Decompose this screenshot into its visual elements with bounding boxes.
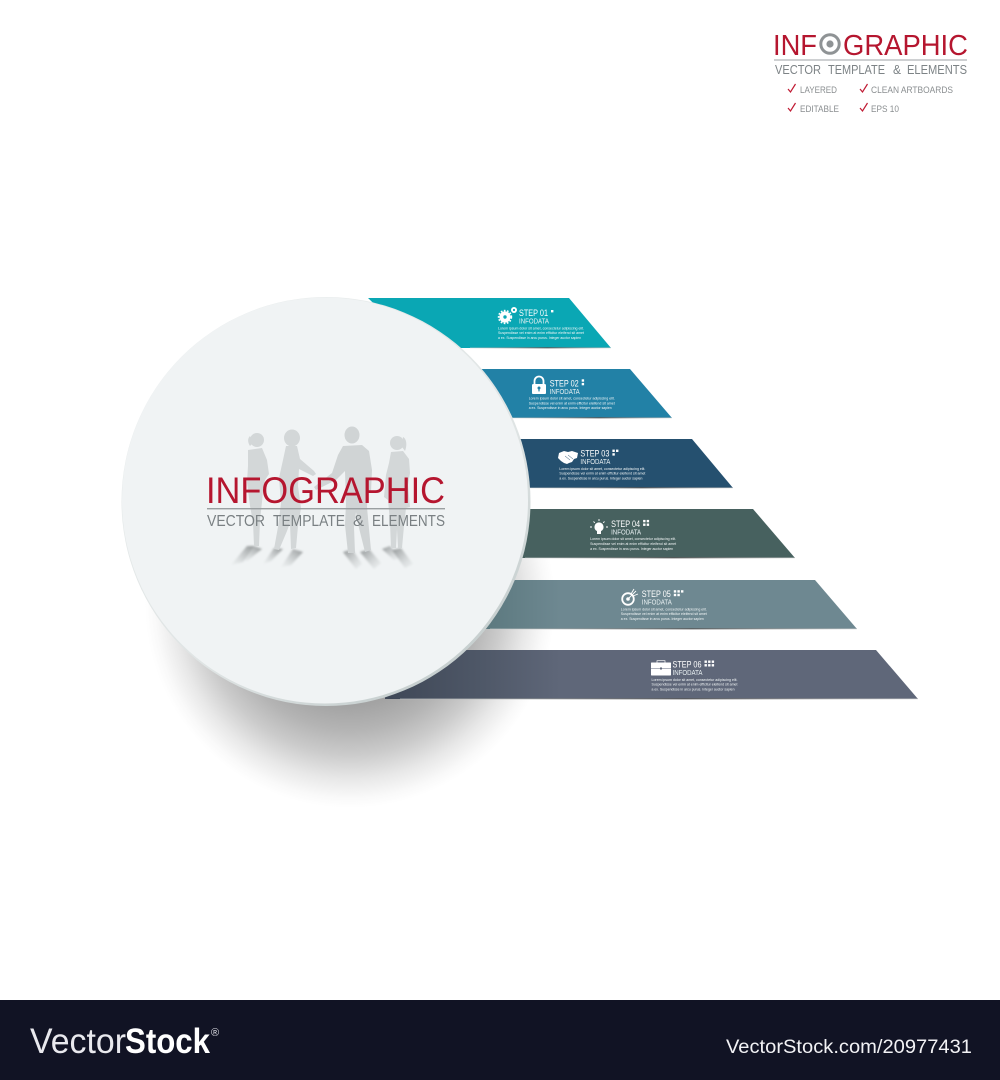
step 06 text: Suspendisse vel enim at enim efficitur eleifend sit amet — [652, 682, 738, 686]
centre title: & — [353, 513, 365, 530]
logo subtitle: VECTOR — [775, 63, 821, 77]
logo subtitle: TEMPLATE — [828, 63, 885, 77]
step 01 text: Lorem ipsum dolor sit amet, consectetur adipiscing elit. — [498, 325, 584, 330]
logo subtitle: & — [893, 63, 902, 77]
step 05 text: STEP 05 — [642, 589, 671, 599]
feature checklist — [788, 84, 953, 114]
main circle — [122, 297, 530, 706]
footer image id: VectorStock.com/20977431 — [726, 1036, 972, 1058]
step 04 text: Suspendisse vel enim at enim efficitur eleifend sit amet — [590, 541, 677, 546]
feature checklist: EPS 10 — [871, 104, 899, 114]
logo subtitle — [775, 63, 967, 77]
step 01 text: a ex. Suspendisse in arcu purus. Integer auctor sapien — [498, 335, 581, 340]
step 06 text: STEP 06 — [672, 660, 702, 670]
icon: gears — [499, 307, 517, 323]
step 03 text: a ex. Suspendisse in arcu purus. Integer auctor sapien — [559, 476, 642, 480]
step 04 text: INFODATA — [611, 527, 641, 536]
step 05 text: a ex. Suspendisse in arcu purus. Integer auctor sapien — [621, 616, 704, 621]
circle drop shadow — [145, 398, 555, 808]
footer logo: Vector — [30, 1022, 126, 1061]
step 04 text: Lorem ipsum dolor sit amet, consectetur adipiscing elit. — [590, 536, 676, 541]
step 06 text: INFODATA — [672, 668, 703, 677]
step 03 text — [559, 449, 646, 480]
centre title: TEMPLATE — [273, 513, 345, 530]
step 03 content — [558, 449, 646, 480]
step 02 text: Suspendisse vel enim at enim efficitur eleifend sit amet — [529, 400, 616, 405]
step 04 text — [590, 519, 677, 551]
step 06 content — [651, 660, 738, 691]
step 02 text: Lorem ipsum dolor sit amet, consectetur adipiscing elit. — [529, 396, 615, 401]
step 03 text: Lorem ipsum dolor sit amet, consectetur adipiscing elit. — [559, 466, 645, 471]
feature checklist: CLEAN ARTBOARDS — [871, 85, 953, 95]
step 05 text — [621, 589, 708, 621]
logo wordmark: GRAPHIC — [843, 30, 968, 62]
top-right logo — [773, 30, 968, 114]
icon: padlock — [532, 376, 546, 394]
feature checklist: EDITABLE — [800, 104, 839, 114]
centre title — [206, 470, 445, 530]
band 4 — [440, 509, 795, 558]
footer logo: ® — [211, 1027, 219, 1039]
step 05 text: Suspendisse vel enim at enim efficitur eleifend sit amet — [621, 611, 708, 616]
band 2 — [420, 369, 672, 418]
person 1 — [247, 433, 269, 546]
step 03 text: INFODATA — [580, 457, 610, 466]
person 4 — [384, 436, 410, 548]
band 6 — [385, 650, 918, 699]
silhouettes of business people — [231, 426, 413, 569]
step 03 text: Suspendisse vel enim at enim efficitur eleifend sit amet — [559, 471, 646, 476]
logo subtitle: ELEMENTS — [907, 63, 967, 77]
step 06 text: a ex. Suspendisse in arcu purus. Integer auctor sapien — [652, 686, 734, 691]
step 02 text — [529, 378, 616, 410]
step 04 content — [590, 519, 677, 551]
person 2 — [274, 430, 316, 550]
step 05 text: Lorem ipsum dolor sit amet, consectetur adipiscing elit. — [621, 606, 707, 612]
icon: briefcase — [651, 661, 671, 676]
centre title: INFOGRAPHIC — [206, 470, 445, 511]
feature checklist: LAYERED — [800, 85, 837, 95]
footer bar — [0, 1000, 1000, 1080]
pyramid bands — [368, 298, 918, 699]
band 3 — [440, 439, 733, 488]
step 02 text: a ex. Suspendisse in arcu purus. Integer auctor sapien — [529, 405, 612, 410]
band 1 — [368, 298, 611, 348]
step 04 text: a ex. Suspendisse in arcu purus. Integer auctor sapien — [590, 546, 673, 551]
icon: light bulb — [590, 519, 608, 534]
footer logo: Stock — [125, 1022, 210, 1061]
step 06 text — [652, 660, 738, 691]
step 02 text: STEP 02 — [550, 378, 579, 388]
icon: handshake — [558, 451, 578, 464]
step 05 content — [621, 589, 708, 621]
footer logo — [30, 1022, 219, 1061]
step 01 content — [498, 307, 585, 340]
step 05 text: INFODATA — [642, 598, 672, 607]
centre title: ELEMENTS — [372, 513, 445, 530]
step 04 text: STEP 04 — [611, 519, 640, 529]
icon: target with arrows — [622, 589, 638, 605]
logo target O — [821, 35, 839, 53]
step 06 text: Lorem ipsum dolor sit amet, consectetur adipiscing elit. — [652, 677, 738, 682]
step 03 text: STEP 03 — [580, 449, 609, 459]
person 3 — [314, 426, 372, 553]
band 5 — [430, 580, 857, 629]
logo wordmark: INF — [773, 30, 817, 62]
step 02 content — [529, 376, 616, 410]
foot shadows — [231, 546, 413, 569]
step 01 text: INFODATA — [519, 316, 549, 326]
logo wordmark — [773, 30, 968, 62]
step 01 text: Suspendisse vel enim at enim efficitur eleifend sit amet — [498, 330, 585, 335]
step 02 text: INFODATA — [550, 387, 580, 396]
centre title: VECTOR — [207, 513, 265, 530]
step 01 text: STEP 01 — [519, 308, 548, 318]
step 01 text — [498, 308, 585, 340]
